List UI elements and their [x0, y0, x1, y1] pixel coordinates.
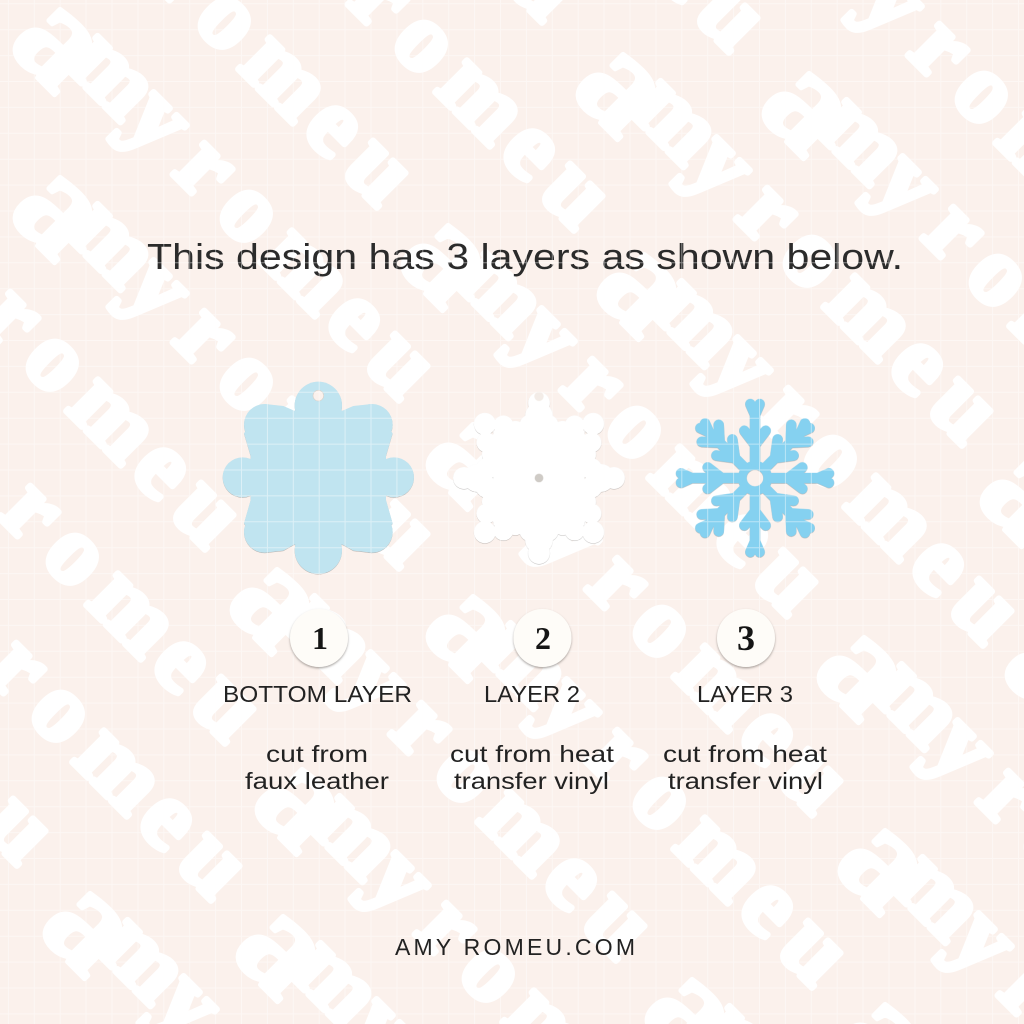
watermark pattern: repeated amy romeu wordmark: a: [14, 840, 176, 1002]
description: layer 2 material: transfer vinyl: [454, 768, 609, 794]
layer 2: white snowflake backing: [453, 392, 625, 564]
layer 1: scalloped tag shape: [223, 382, 414, 574]
watermark pattern: repeated amy romeu wordmark: my romeu: [461, 420, 875, 833]
watermark pattern: repeated amy romeu wordmark: a: [733, 20, 895, 182]
description: layer 1 material: cut from: [266, 741, 368, 767]
watermark pattern: repeated amy romeu wordmark: my romeu: [611, 50, 1024, 463]
description: layer 2 material: cut from heat: [450, 741, 615, 767]
watermark pattern: repeated amy romeu wordmark: a: [207, 863, 369, 1024]
number badge 2: 2: [535, 620, 551, 656]
label: layer 2: LAYER 2: [484, 681, 580, 707]
label: layer 3: LAYER 3: [697, 681, 793, 707]
watermark pattern: repeated amy romeu wordmark: my romeu: [48, 5, 462, 418]
watermark pattern: repeated amy romeu wordmark: a: [788, 584, 950, 746]
description: layer 2 material: [450, 741, 615, 794]
description: layer 3 material: transfer vinyl: [668, 768, 823, 794]
watermark pattern: repeated amy romeu wordmark: my romeu: [48, 173, 462, 586]
watermark pattern: repeated amy romeu wordmark: a: [397, 543, 559, 705]
watermark pattern: repeated amy romeu wordmark: a: [201, 516, 363, 678]
number badge 1: [290, 609, 348, 667]
description: layer 3 material: cut from heat: [663, 741, 828, 767]
watermark pattern: repeated amy romeu wordmark: a: [372, 172, 534, 334]
watermark pattern: repeated amy romeu wordmark: a: [568, 201, 730, 363]
footer website: AMY ROMEU.COM: [395, 934, 635, 960]
description: layer 1 material: faux leather: [245, 768, 389, 794]
number badge 1: 1: [312, 620, 328, 656]
number badge 3: 3: [737, 618, 755, 658]
description: layer 1 material: [245, 741, 389, 794]
watermark pattern: repeated amy romeu wordmark: my romeu: [436, 221, 850, 634]
watermark pattern: repeated amy romeu wordmark: a: [397, 371, 559, 533]
number badge 2: [514, 609, 572, 667]
title: This design has 3 layers as shown below.: [147, 236, 903, 277]
label: bottom layer: BOTTOM LAYER: [223, 681, 412, 707]
watermark pattern: repeated amy romeu wordmark: a: [547, 1, 709, 163]
watermark pattern: repeated amy romeu wordmark: a: [226, 716, 388, 878]
watermark pattern: repeated amy romeu wordmark: a: [809, 777, 971, 939]
number badge 3: [717, 609, 775, 667]
description: layer 3 material: [663, 741, 828, 794]
watermark pattern: repeated amy romeu wordmark: my romeu: [265, 565, 679, 978]
watermark pattern: repeated amy romeu wordmark: my romeu: [461, 592, 875, 1005]
layer 3: blue snowflake: [681, 404, 829, 552]
